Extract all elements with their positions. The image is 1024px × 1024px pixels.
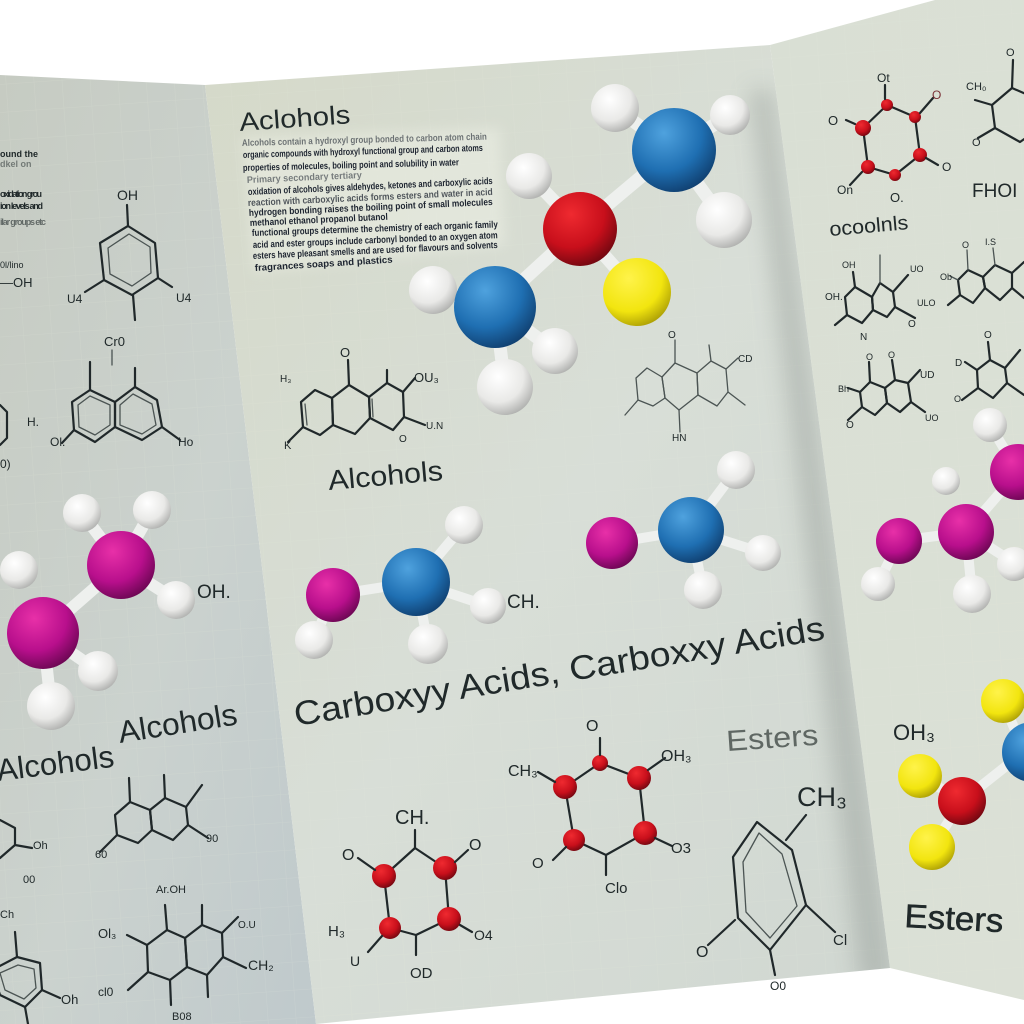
structure: right panel rings row 1 (825, 255, 936, 343)
structure: right panel rings row 2: O (888, 350, 895, 360)
structure: right panel rings row 3: Ob (940, 272, 952, 282)
text block: left page fragments: oxidation grou (0, 189, 42, 199)
structure: right panel rings row 2: Bh (838, 384, 849, 394)
label: ooclonls right: ocoolnls (829, 212, 909, 241)
structure: red ring lower left centre: U (350, 953, 360, 969)
structure: right panel rings row 2: UD (920, 370, 934, 381)
labels: main text (0, 181, 1017, 939)
structure: double ring left middle: Ho (178, 435, 194, 449)
structure: right panel rings row 3 (940, 237, 1024, 305)
label: Alcohols left 1: Alcohols (116, 697, 240, 750)
structure: right panel rings row 2: O (866, 352, 873, 362)
structure: partial ring left edge (0, 405, 7, 445)
structure: benzene top far right: CH₀ (966, 81, 986, 93)
text block: paragraph: acid and ester groups include carbonyl bonded to an oxygen atom (253, 230, 498, 251)
text block: paragraph: functional groups determine the chemistry of each organic family (252, 219, 499, 239)
molecule: right panel magenta (861, 408, 1024, 613)
molecule: centre left (295, 506, 506, 664)
structure: red ring lower left centre: OD (410, 965, 433, 982)
label: Esters right: Esters (904, 897, 1004, 939)
structure: double ring left middle: H. (27, 415, 39, 429)
structure: red ring lower left centre (328, 830, 493, 982)
structure: triple ring centre left: O (340, 345, 350, 360)
structure: red ring top right: O (828, 113, 838, 128)
panel: centre page (205, 45, 890, 1024)
panel: right page (770, 0, 1024, 1000)
structure: left bottom benzene (0, 909, 78, 1024)
structure: right panel rings row 2: O (846, 420, 854, 431)
structure: red ring lower left centre: O (342, 847, 354, 864)
structure: red ring bottom centre: Clo (605, 880, 628, 897)
panel: left page (0, 75, 316, 1024)
text block: paragraph: Primary secondary tertiary (247, 170, 363, 186)
structure: right panel rings row 4: O (984, 330, 992, 341)
label: CH large ring: CH₃ (797, 782, 847, 812)
structure: right panel rings row 3: O (962, 240, 969, 250)
molecule: right panel red and yellow (898, 679, 1024, 870)
text block: left page fragments: ilar groups etc (0, 217, 46, 227)
structure: triple ring centre left: U.N (426, 421, 443, 432)
structure: red ring top right (828, 71, 951, 205)
structure: large ring bottom right (696, 815, 847, 993)
structure: right panel rings row 4: D (955, 358, 962, 369)
structure: benzene left upper: OH (117, 187, 138, 203)
label: CH centre: CH. (507, 592, 540, 613)
text block: paragraph: reaction with carboxylic acids forms esters and water in acid (248, 187, 493, 209)
structure: red ring top right: O. (890, 190, 904, 205)
structure: faded rings centre right (625, 330, 752, 444)
structure: triple ring centre left: OU₃ (414, 370, 439, 385)
structure: red ring top right: Ot (877, 71, 890, 85)
structure: benzene top far right (966, 47, 1024, 149)
structure: left bottom benzene: Oh (61, 992, 78, 1007)
structure: right panel rings row 1: UO (910, 264, 924, 274)
structure: faded rings centre right: CD (738, 354, 752, 365)
molecule: centre right (586, 451, 781, 609)
structure: large ring bottom right: Cl (833, 932, 847, 949)
label: Alcohols centre: Alcohols (327, 455, 444, 496)
label: Carboxy Acids: Carboxyy Acids, Carboxxy Acids (291, 610, 827, 734)
structure: triple ring centre left: O (399, 434, 407, 445)
structure: red ring bottom centre: O (586, 718, 598, 735)
text block: paragraph: hydrogen bonding raises the boiling point of small molecules (249, 197, 493, 219)
structure: double ring left middle: 0) (0, 457, 11, 471)
structure: red ring top right: O (942, 160, 951, 174)
text block: left page fragments: —OH (0, 275, 32, 290)
label: FHOI right: FHOI (972, 181, 1017, 202)
label: OH left: OH. (197, 582, 231, 603)
structure: benzene left upper (67, 187, 192, 320)
text block: paragraph: properties of molecules, boiling point and solubility in water (243, 157, 459, 174)
structure: red ring lower left centre: O (469, 837, 481, 854)
structure: left bottom double ring: O.U (238, 920, 256, 931)
structure: red ring top right: O (932, 88, 941, 102)
structure: faded rings centre right: O (668, 330, 676, 341)
structure: left lower partial ring (0, 820, 48, 886)
structure: right panel rings row 4: O (954, 394, 961, 404)
structure: left bottom double ring: B08 (172, 1011, 192, 1023)
structure: triple ring centre left: H₃ (280, 374, 291, 385)
structure: left bottom double ring: Ol₃ (98, 926, 116, 941)
text block: paragraph (242, 128, 505, 274)
text block: paragraph: methanol ethanol propanol butanol (250, 212, 388, 229)
molecule: left panel (0, 491, 195, 730)
structure: left bottom double ring (98, 884, 274, 1023)
text block: paragraph: fragrances soaps and plastics (255, 255, 393, 274)
structure: benzene left upper: U4 (176, 291, 192, 305)
structure: right panel rings row 4 (954, 330, 1024, 404)
text block: paragraph: organic compounds with hydroxyl functional group and carbon atoms (243, 143, 483, 161)
structure: faded rings centre right: HN (672, 433, 686, 444)
structure: left lower double ring: 60 (95, 849, 107, 861)
structure: left lower double ring (95, 775, 218, 861)
structure: benzene top far right: O (1006, 47, 1015, 59)
structure: benzene top far right: O (972, 137, 981, 149)
structure: red ring bottom centre: CH₃ (508, 763, 538, 780)
structure: red ring bottom centre: O (532, 855, 544, 872)
label: CH lower ring: CH. (395, 807, 429, 829)
structure: double ring left middle (0, 334, 194, 471)
structure: left lower double ring: 90 (206, 833, 218, 845)
text block: paragraph: esters have pleasant smells and are used for flavours and solvents (253, 240, 498, 262)
structure: right panel rings row 2 (838, 350, 938, 431)
structure: right panel rings row 1: OH (842, 260, 856, 270)
structure: right panel rings row 1: N (860, 332, 867, 343)
structure: large ring bottom right: O (696, 944, 708, 961)
structure: double ring left middle: Ol. (50, 435, 65, 449)
text block: paragraph: Alcohols contain a hydroxyl group bonded to carbon atom chain (242, 132, 487, 149)
molecule: large top molecule (409, 84, 752, 415)
structure: right panel rings row 1: ULO (917, 298, 936, 308)
text block: paragraph: oxidation of alcohols gives aldehydes, ketones and carboxylic acids (248, 176, 493, 198)
structure: red ring top right: On (837, 183, 853, 197)
structure: left bottom double ring: Ar.OH (156, 884, 186, 896)
structure: red ring bottom centre: OH₃ (661, 748, 692, 765)
label: OH right: OH₃ (893, 720, 935, 745)
structure: right panel rings row 1: O (908, 319, 916, 330)
structure: left lower partial ring: Oh (33, 840, 48, 852)
text block: left page fragments: ion levels and (0, 201, 43, 211)
structure: red ring bottom centre (508, 718, 692, 897)
structure: left bottom benzene: Ch (0, 909, 14, 921)
structure: benzene left upper: U4 (67, 292, 83, 306)
structure: left lower partial ring: 00 (23, 874, 35, 886)
text block: left page fragments: dkel on (0, 159, 32, 169)
structure: large ring bottom right: O0 (770, 979, 786, 993)
structure: right panel rings row 1: OH. (825, 292, 843, 303)
label: Esters centre: Esters (725, 720, 819, 758)
text block: left page fragments: ound the (0, 149, 38, 159)
structure: red ring lower left centre: O4 (474, 927, 493, 943)
structure: right panel rings row 3: I.S (985, 237, 996, 247)
structure: right panel rings row 2: UO (925, 413, 938, 423)
structure: triple ring centre left (280, 345, 443, 452)
structure: red ring bottom centre: O3 (671, 840, 691, 857)
structure: left bottom double ring: CH₂ (248, 957, 274, 973)
structure: left bottom double ring: cl0 (98, 985, 114, 999)
structure: double ring left middle: Cr0 (104, 334, 125, 349)
heading: Alcohols top: Aclohols (238, 99, 351, 137)
structure: red ring lower left centre: H₃ (328, 923, 345, 940)
text block: left page fragments (0, 149, 46, 290)
text block: left page fragments: 0l/lino (0, 260, 24, 270)
structure: triple ring centre left: K (284, 440, 292, 452)
